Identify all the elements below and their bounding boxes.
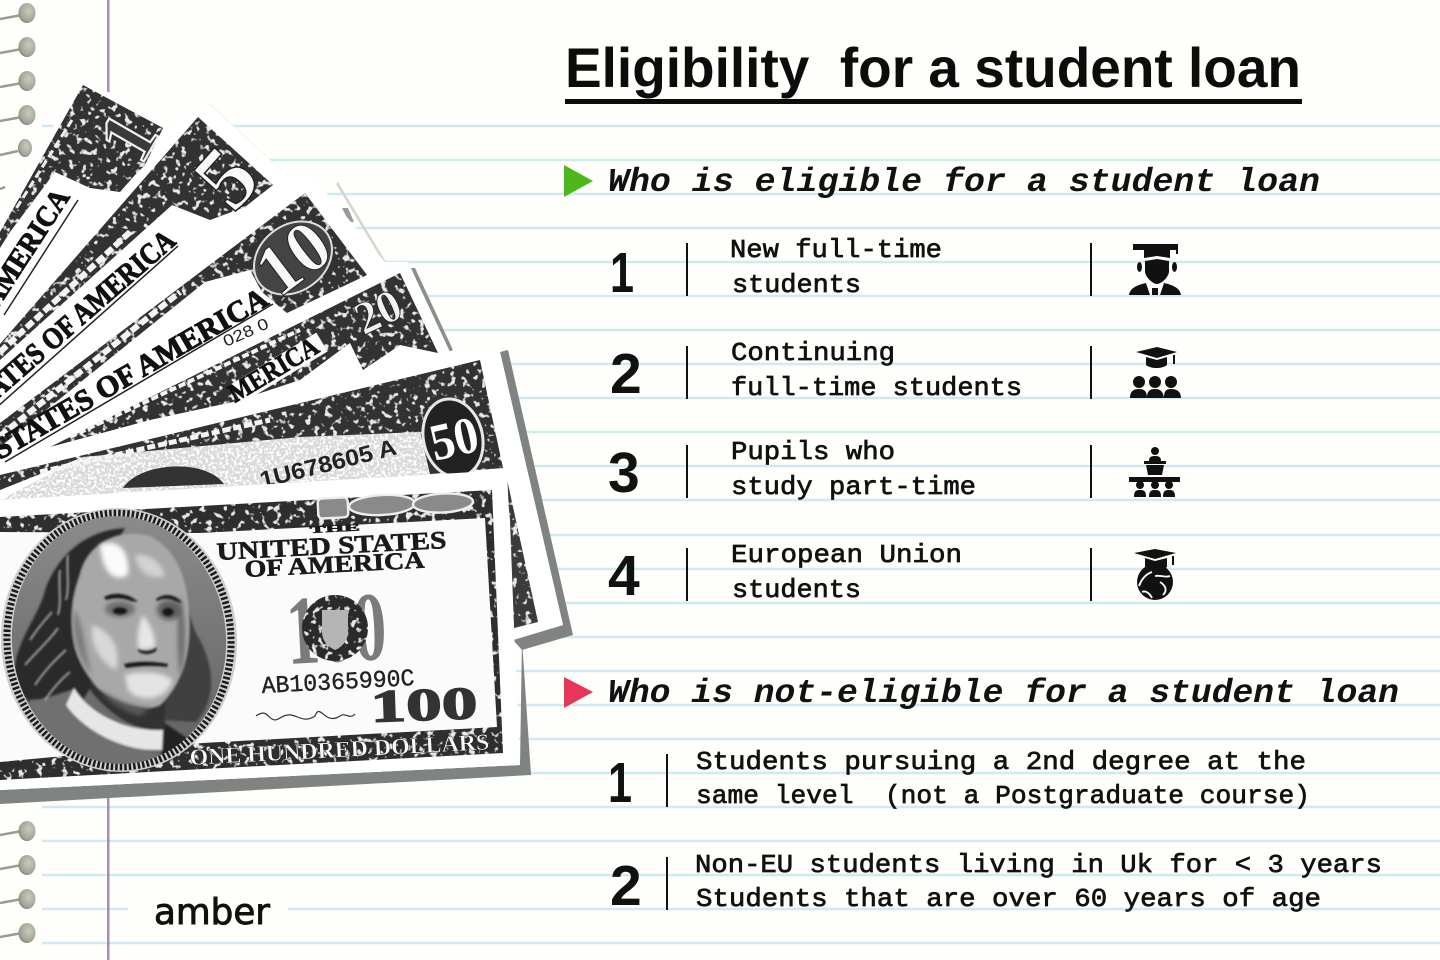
row 2: 2 [610, 342, 642, 406]
corner numeral: 100 [370, 677, 478, 732]
twenty dollar bill [50, 273, 438, 447]
row 1 [610, 235, 1181, 305]
item 1: Students pursuing a 2nd degree at the [696, 747, 1306, 777]
ten dollar bill: 028 0 [221, 316, 272, 351]
signature [256, 711, 355, 720]
bill title: UNITED STATES [216, 527, 447, 566]
central numeral with seal: 100 [283, 573, 389, 686]
title: Eligibility for a student loan [565, 36, 1301, 99]
row 2 [610, 338, 1181, 406]
section: eligible [564, 164, 1320, 608]
fan of dollar bills [0, 78, 573, 804]
row 1: students [732, 270, 861, 300]
bill shadows [0, 104, 573, 804]
ten dollar bill: 10 [240, 204, 346, 312]
item 1 [608, 747, 1310, 815]
bill title: OF AMERICA [244, 548, 426, 583]
row 3: study part-time [731, 472, 976, 502]
eligible heading: Who is eligible for a student loan [608, 164, 1320, 201]
row 3 [608, 437, 1180, 505]
portrait of Franklin [1, 508, 237, 772]
hundred dollar bill [0, 490, 503, 790]
bill title: THE [310, 523, 360, 536]
fifty dollar bill: 1U678605 A [257, 434, 399, 493]
item 2: Students that are over 60 years of age [696, 884, 1321, 914]
row 1: 1 [610, 241, 634, 305]
icon: globe with cap [1134, 549, 1176, 600]
section: not eligible [564, 675, 1399, 918]
central numeral with seal [283, 573, 389, 686]
row 1: New full-time [730, 235, 942, 265]
row 4: European Union [731, 540, 962, 570]
neck shadow [88, 682, 166, 730]
coat [28, 689, 162, 764]
row 2: full-time students [731, 373, 1022, 403]
top right numeral [317, 492, 473, 519]
icon: class with cap [1130, 347, 1181, 398]
bill legend: ONE HUNDRED DOLLARS [189, 729, 490, 770]
not eligible heading: Who is not-eligible for a student loan [608, 675, 1399, 712]
twenty dollar bill: MERICA [223, 331, 324, 408]
item 1: same level (not a Postgraduate course) [696, 781, 1310, 811]
engraved frame [0, 490, 503, 780]
bill title [216, 523, 447, 583]
one dollar bill: 1 [80, 98, 175, 175]
row 3: 3 [608, 441, 640, 505]
icon: lecture podium [1129, 447, 1180, 497]
item 2 [610, 850, 1382, 918]
five dollar bill: 5 [175, 128, 278, 228]
row 4 [608, 540, 1176, 608]
hair [14, 528, 125, 722]
fifty dollar bill: 50 [425, 406, 484, 473]
row 2: Continuing [731, 338, 895, 368]
row 4: students [732, 575, 861, 605]
hundred dollar paper [0, 470, 520, 790]
row 3: Pupils who [731, 437, 895, 467]
fifty dollar bill [0, 360, 538, 628]
collar [66, 688, 163, 750]
item 2: 2 [610, 854, 642, 918]
serial number: AB10365990C [261, 666, 415, 701]
row 4: 4 [608, 544, 640, 608]
one dollar bill [0, 85, 175, 315]
spiral binding [0, 3, 36, 943]
twenty dollar bill: 20 [346, 279, 409, 344]
bill paper [0, 78, 563, 790]
icon: graduate [1129, 244, 1181, 295]
icon: green arrow [564, 165, 593, 197]
item 2: Non-EU students living in Uk for < 3 years [695, 850, 1382, 880]
face base [72, 534, 189, 708]
brand logo: amber [154, 892, 270, 933]
item 1: 1 [608, 751, 632, 815]
ten dollar bill [0, 193, 367, 466]
five dollar bill [0, 117, 278, 424]
icon: red arrow [564, 677, 593, 708]
